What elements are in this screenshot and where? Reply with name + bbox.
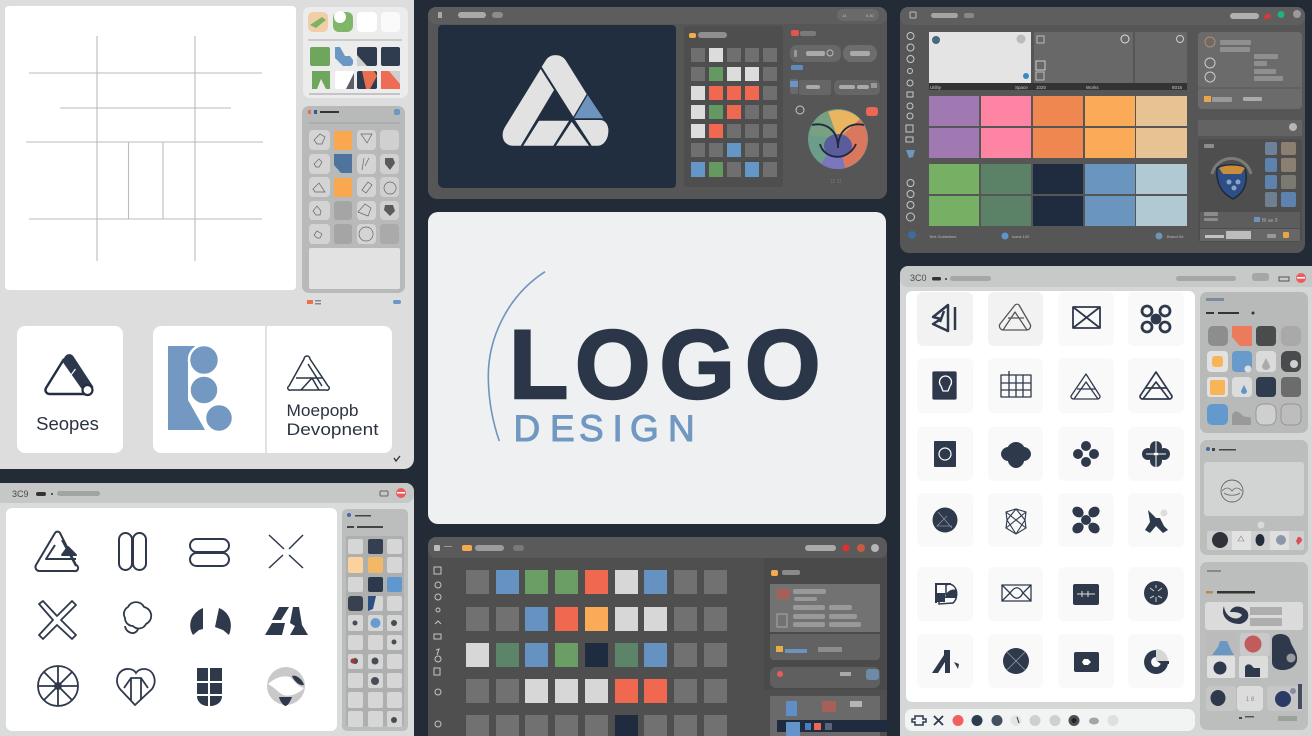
icons row 2 (933, 371, 1172, 399)
subtitle: DESIGN: DESIGN (514, 408, 695, 449)
brand card: Moepopb Devopnent: Moepopb (286, 401, 358, 420)
brand card: Seopes: Seopes (36, 413, 99, 434)
preview cards: Utility (930, 85, 942, 90)
icons row 3 (38, 666, 305, 706)
brand card: Moepopb Devopnent: Devopnent (286, 420, 379, 439)
icons row 5 (935, 581, 1168, 605)
grid construction canvas (5, 6, 296, 290)
icon tiles (917, 292, 1184, 688)
icon: blue block with circles (168, 345, 233, 432)
icon grid canvas (6, 508, 337, 731)
title: LOGO: LOGO (509, 310, 820, 419)
panel: top right colour system workspace: Text Guidelines (929, 234, 956, 239)
panel: centre main logo (428, 212, 886, 524)
icon: outline triangle (288, 356, 329, 390)
icons row 2 (39, 601, 308, 639)
decorative arc (488, 272, 545, 441)
brand card: Moepopb Devopnent (153, 326, 392, 453)
panel: top centre dark logo workspace: 5.30 (866, 13, 875, 18)
icon: colour wheel (808, 109, 868, 169)
panel: grid construction and brand cards (0, 0, 414, 469)
right info panel (1198, 32, 1302, 109)
control pills (790, 30, 880, 116)
swatch grid panel (684, 26, 783, 187)
right details sidebar (764, 558, 889, 736)
side panel: logo explorations (1200, 562, 1308, 730)
preview cards: Space (1015, 85, 1028, 90)
panel: top right colour system workspace (900, 7, 1305, 253)
icons row 3 (934, 441, 1170, 468)
panel: right logo icon library: 3C0 (910, 273, 927, 283)
panel: top centre dark logo workspace: 11 11 (830, 179, 842, 185)
icons row 6 (932, 648, 1169, 674)
panel: top centre dark logo workspace: 14 (842, 13, 847, 18)
colour swatches: cool (929, 164, 1187, 226)
side panel: emblem preview (1200, 440, 1308, 555)
icon library canvas (906, 291, 1195, 702)
icons row 1 (35, 532, 303, 571)
brand card: Seopes (17, 326, 123, 453)
colour swatches: warm (929, 96, 1187, 158)
left icon rail (906, 32, 914, 221)
preview cards: 1020 (1036, 85, 1047, 90)
right icon sidebar (342, 509, 408, 731)
bottom toolbar (905, 709, 1195, 731)
panel: right logo icon library (900, 266, 1312, 736)
side panel: logo explorations: 1 8 (1246, 697, 1255, 703)
icons row 4 (932, 504, 1168, 536)
side panel: shape swatches (1200, 292, 1308, 433)
icon: large triangle logo (503, 55, 608, 146)
logo canvas (438, 25, 676, 188)
swatch grid (466, 570, 727, 736)
panel: bottom left icon set: 3C9 (12, 489, 29, 499)
tool panel (302, 106, 405, 293)
left icon rail (434, 567, 441, 727)
panel: bottom centre swatch workspace (428, 537, 889, 736)
panel: top right colour system workspace: Icons 100 (1012, 234, 1030, 239)
panel: bottom left icon set (0, 483, 414, 736)
icons row 1 (933, 304, 1170, 332)
panel: top right colour system workspace: Brand Kit (1167, 234, 1184, 239)
preview cards: 8015 (1172, 85, 1183, 90)
shield emblem panel: Bl ae 9 (1262, 218, 1278, 224)
preview cards: Works (1086, 85, 1099, 90)
preview cards (929, 32, 1187, 90)
panel: top centre dark logo workspace (428, 7, 887, 199)
icon: triangle mark (45, 354, 94, 395)
shield emblem panel (1198, 139, 1302, 242)
swatch palette panel (303, 7, 408, 98)
